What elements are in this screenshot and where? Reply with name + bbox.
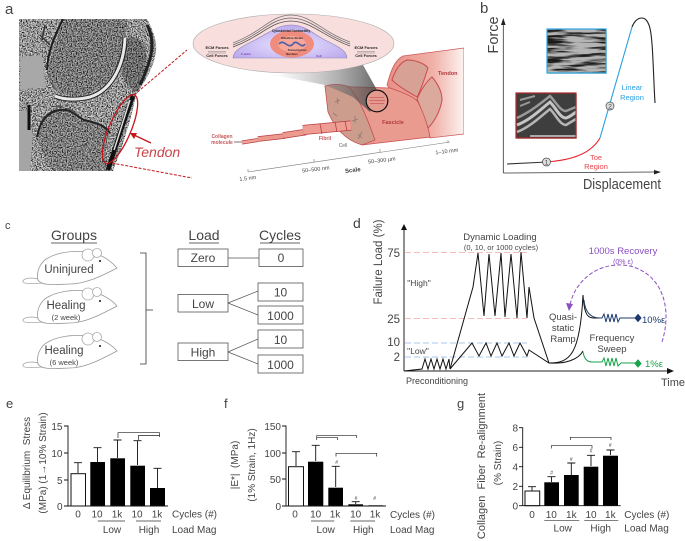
marker 2 bbox=[606, 102, 614, 110]
axis captions: Load Mag bbox=[390, 525, 434, 536]
reference dashed lines bbox=[405, 252, 527, 357]
error bars bbox=[528, 450, 614, 491]
axis label: displacement: Displacement bbox=[583, 177, 661, 193]
group underlines bbox=[544, 519, 618, 521]
scale axis: Scale bbox=[345, 167, 362, 175]
label: f: f bbox=[224, 396, 228, 411]
axis captions bbox=[624, 510, 669, 534]
cell mechanics ellipse callout: Cytoskeletal Contractility bbox=[272, 29, 310, 33]
category labels: Low bbox=[554, 524, 573, 534]
micrograph: crimped fibers bbox=[516, 93, 577, 139]
y axis title bbox=[22, 412, 49, 514]
linear region label: Linear bbox=[622, 83, 643, 92]
y ticks: 0 bbox=[512, 502, 518, 512]
y axis title: (1% Strain, 1Hz) bbox=[247, 428, 258, 502]
significance markers: # bbox=[590, 448, 593, 454]
tendon label: Tendon bbox=[134, 144, 180, 160]
category labels: 10 bbox=[546, 510, 557, 521]
frequency sweep label: Sweep bbox=[597, 344, 627, 355]
significance brackets bbox=[551, 437, 611, 448]
category labels: 10 bbox=[585, 510, 597, 521]
cell mechanics ellipse callout: ECM Forces bbox=[354, 45, 378, 50]
panel e: equilibrium stress bar chart bbox=[22, 412, 217, 536]
category labels bbox=[529, 510, 617, 534]
recovery arrow bbox=[566, 265, 666, 342]
y ticks: 150 bbox=[264, 422, 281, 433]
axis captions bbox=[390, 510, 435, 536]
cell mechanics ellipse callout: Nucleus bbox=[286, 52, 298, 56]
category labels: Low bbox=[103, 525, 122, 536]
y axis title bbox=[476, 393, 504, 539]
dynamic loading label bbox=[463, 232, 539, 252]
y ticks bbox=[512, 424, 518, 512]
hierarchy labels: molecule bbox=[211, 140, 233, 146]
quasi-static label: Ramp bbox=[550, 334, 576, 345]
heading: load: Load bbox=[188, 227, 220, 243]
axes bbox=[519, 428, 621, 506]
heading: cycles: Cycles bbox=[259, 227, 301, 243]
y ticks bbox=[51, 422, 63, 513]
hierarchy labels: Fascicle bbox=[382, 120, 404, 126]
cell mechanics ellipse callout: Cell Forces bbox=[355, 53, 378, 58]
panel b: force displacement chart bbox=[486, 16, 661, 193]
panel f: dynamic modulus bar chart bbox=[230, 422, 435, 536]
error bars bbox=[292, 445, 360, 504]
panel a: knee MRI bbox=[19, 19, 159, 171]
axis captions: Cycles (#) bbox=[172, 510, 217, 520]
cycle boxes: 1000 bbox=[267, 309, 294, 323]
category labels bbox=[75, 510, 163, 536]
low label: "Low" bbox=[407, 346, 429, 356]
scale axis: 50–300 µm bbox=[368, 156, 396, 166]
bars bbox=[71, 458, 165, 506]
hierarchy labels: Tendon bbox=[438, 71, 458, 77]
heading: groups: Groups bbox=[51, 227, 97, 243]
category labels: 1k bbox=[370, 510, 381, 520]
y ticks: 4 bbox=[512, 462, 518, 474]
significance markers: # bbox=[373, 496, 376, 502]
significance markers: # bbox=[609, 443, 612, 449]
axis captions: Cycles (#) bbox=[624, 510, 669, 521]
category labels bbox=[292, 510, 381, 536]
category labels: 10 bbox=[91, 510, 103, 520]
mouse: healing 2 week bbox=[23, 288, 117, 324]
category labels: 0 bbox=[75, 510, 81, 520]
hierarchy labels bbox=[211, 71, 458, 149]
axes bbox=[64, 426, 168, 506]
toe region label: Toe bbox=[590, 153, 602, 162]
panel g: fiber realignment bar chart bbox=[476, 393, 669, 539]
group bracket bbox=[140, 253, 153, 364]
tendon highlight ellipse bbox=[95, 91, 145, 167]
y ticks: 0 bbox=[57, 502, 63, 513]
marker 1 bbox=[542, 158, 550, 166]
significance brackets bbox=[317, 436, 377, 456]
y axis title: (MPa) (1→10% Strain) bbox=[38, 412, 49, 514]
cell marks on fascicle face bbox=[333, 98, 362, 139]
bars bbox=[288, 462, 383, 506]
label: g: g bbox=[457, 396, 464, 411]
time label: Time bbox=[661, 377, 685, 389]
y ticks bbox=[264, 422, 281, 513]
axis captions: Load Mag bbox=[624, 524, 669, 534]
axes bbox=[401, 224, 674, 374]
significance markers bbox=[335, 460, 376, 502]
load boxes: High bbox=[191, 346, 215, 360]
preconditioning label: Preconditioning bbox=[406, 376, 468, 386]
category labels: 1k bbox=[152, 510, 163, 520]
scale axis: 50–500 nm bbox=[302, 165, 330, 175]
mouse: uninjured bbox=[23, 248, 117, 285]
fibrils bbox=[234, 121, 351, 142]
10 percent label: 10%ε bbox=[642, 315, 666, 326]
bars bbox=[525, 456, 618, 506]
category labels: Low bbox=[317, 525, 336, 536]
label: d: d bbox=[353, 215, 361, 231]
fascicle body bbox=[325, 86, 430, 145]
cycle boxes: 10 bbox=[274, 286, 287, 300]
y axis title: Δ Equilibrium Stress bbox=[22, 417, 33, 509]
recovery label bbox=[589, 246, 658, 266]
high label: "High" bbox=[407, 278, 431, 288]
scale axis bbox=[239, 140, 459, 183]
low load trace bbox=[450, 343, 583, 369]
toe region label bbox=[584, 153, 608, 171]
1 percent label: 1%ε bbox=[645, 359, 664, 370]
quasi-static label: Quasi- bbox=[549, 312, 577, 323]
y axis title: (% Strain) bbox=[493, 441, 504, 485]
y axis tick labels: 25 bbox=[387, 314, 400, 326]
cell mechanics ellipse callout: F-actin bbox=[241, 52, 251, 56]
cell mechanics ellipse callout: Effective Strain bbox=[281, 36, 303, 40]
category labels: 10 bbox=[350, 510, 362, 520]
cell mechanics ellipse callout bbox=[193, 14, 394, 73]
dynamic loading label: Dynamic Loading bbox=[463, 232, 537, 243]
arrow: to tendon bbox=[130, 133, 151, 143]
linear region label: Region bbox=[620, 93, 644, 102]
frequency sweep label: Frequency bbox=[590, 333, 635, 344]
y ticks: 100 bbox=[264, 449, 281, 460]
category labels: 10 bbox=[131, 510, 143, 520]
high load trace bbox=[450, 252, 602, 369]
y ticks: 2 bbox=[512, 482, 518, 493]
label: a: a bbox=[5, 1, 14, 18]
load and cycle connectors bbox=[228, 258, 259, 364]
significance markers: # bbox=[335, 460, 338, 466]
mouse: healing 6 week bbox=[23, 332, 117, 369]
cycle boxes bbox=[258, 249, 303, 373]
load boxes: Zero bbox=[191, 251, 216, 265]
y axis tick labels: 2 bbox=[394, 352, 400, 364]
category labels: High bbox=[139, 525, 159, 536]
significance markers bbox=[550, 443, 612, 476]
axis captions bbox=[172, 510, 217, 536]
significance markers: # bbox=[570, 457, 573, 463]
category labels: 10 bbox=[310, 510, 322, 520]
scale axis: 1–10 mm bbox=[435, 148, 459, 156]
tendon hierarchy illustration bbox=[211, 48, 464, 183]
significance markers: # bbox=[355, 496, 358, 502]
y ticks: 10 bbox=[51, 449, 63, 460]
y ticks: 6 bbox=[512, 443, 518, 454]
fascicle end face bbox=[325, 84, 375, 145]
1 percent strain sweep bbox=[583, 352, 641, 367]
axes bbox=[282, 426, 386, 506]
axis label: force: Force bbox=[486, 16, 502, 54]
mouse: uninjured: Uninjured bbox=[44, 264, 94, 276]
axis label: failure load: Failure Load (%) bbox=[373, 219, 385, 305]
hierarchy labels: Collagen bbox=[211, 134, 233, 140]
y axis title bbox=[230, 428, 258, 502]
recovery label: (0% ε) bbox=[613, 259, 633, 266]
error bars bbox=[74, 440, 162, 488]
preconditioning trace bbox=[404, 359, 450, 371]
category labels: 0 bbox=[292, 510, 298, 520]
y ticks: 50 bbox=[270, 475, 281, 486]
y ticks: 8 bbox=[512, 424, 518, 434]
axes bbox=[501, 18, 661, 174]
category labels: 1k bbox=[605, 510, 617, 521]
panel c: experimental groups bbox=[23, 227, 303, 373]
load boxes: Low bbox=[192, 297, 214, 311]
quasi-static label: static bbox=[552, 323, 574, 334]
mouse: healing 6 week: (6 week) bbox=[50, 358, 79, 367]
magnifier circle bbox=[366, 90, 388, 112]
hierarchy labels: Fibril bbox=[319, 136, 332, 142]
y ticks: 0 bbox=[275, 502, 281, 513]
cycle boxes: 10 bbox=[274, 333, 287, 347]
hierarchy labels: Cell bbox=[339, 143, 347, 149]
group underlines bbox=[311, 520, 375, 522]
magnifier shadow cone bbox=[273, 65, 377, 112]
label: c: c bbox=[5, 220, 11, 232]
category labels: 1k bbox=[566, 510, 578, 521]
cycle boxes: 1000 bbox=[267, 358, 294, 372]
toe region label: Region bbox=[584, 162, 608, 171]
y axis tick labels bbox=[387, 248, 400, 364]
quasi-static label bbox=[549, 312, 577, 345]
marker 1: 1 bbox=[545, 160, 549, 166]
frequency sweep label bbox=[590, 333, 635, 355]
y axis tick labels: 10 bbox=[387, 337, 400, 349]
axis captions: Cycles (#) bbox=[390, 510, 435, 521]
group underlines bbox=[98, 520, 161, 522]
category labels: 1k bbox=[112, 510, 123, 520]
label: e: e bbox=[6, 396, 13, 411]
y ticks: 15 bbox=[51, 422, 63, 433]
mouse: healing 2 week: Healing bbox=[46, 300, 86, 312]
linear region label bbox=[620, 83, 644, 102]
mouse: healing 2 week: (2 week) bbox=[52, 313, 81, 322]
y axis title: |E*| (MPa) bbox=[230, 441, 241, 489]
mouse: healing 6 week: Healing bbox=[44, 345, 84, 357]
category labels: 1k bbox=[330, 510, 341, 520]
category labels: High bbox=[590, 524, 611, 534]
cycle boxes: 0 bbox=[278, 251, 285, 265]
significance brackets bbox=[118, 433, 160, 440]
curve bbox=[507, 18, 655, 164]
scale axis: 1.5 nm bbox=[239, 175, 257, 183]
dashed zoom lines bbox=[112, 50, 192, 178]
category labels: High bbox=[353, 525, 374, 536]
y axis title: Collagen Fiber Re-alignment bbox=[476, 393, 488, 539]
y ticks: 5 bbox=[57, 476, 63, 487]
label: b: b bbox=[480, 0, 488, 17]
category labels: 0 bbox=[529, 510, 535, 521]
dynamic loading label: (0, 10, or 1000 cycles) bbox=[464, 243, 539, 252]
recovery label: 1000s Recovery bbox=[589, 246, 658, 257]
axis captions: Load Mag bbox=[172, 525, 216, 536]
panel d: loading protocol chart bbox=[373, 219, 685, 389]
significance markers: # bbox=[550, 470, 553, 476]
micrograph: aligned fibers bbox=[547, 29, 607, 74]
cell mechanics ellipse callout: ECM Forces bbox=[205, 45, 229, 50]
cell mechanics ellipse callout: Cell Forces bbox=[206, 53, 229, 58]
y axis tick labels: 75 bbox=[387, 248, 400, 260]
cell mechanics ellipse callout: Transcription bbox=[287, 48, 307, 52]
load boxes bbox=[178, 249, 228, 360]
whole tendon bbox=[387, 48, 464, 138]
marker 2: 2 bbox=[608, 104, 612, 110]
10 percent strain sweep bbox=[584, 300, 641, 322]
cell mechanics ellipse callout: Cell bbox=[316, 54, 322, 58]
